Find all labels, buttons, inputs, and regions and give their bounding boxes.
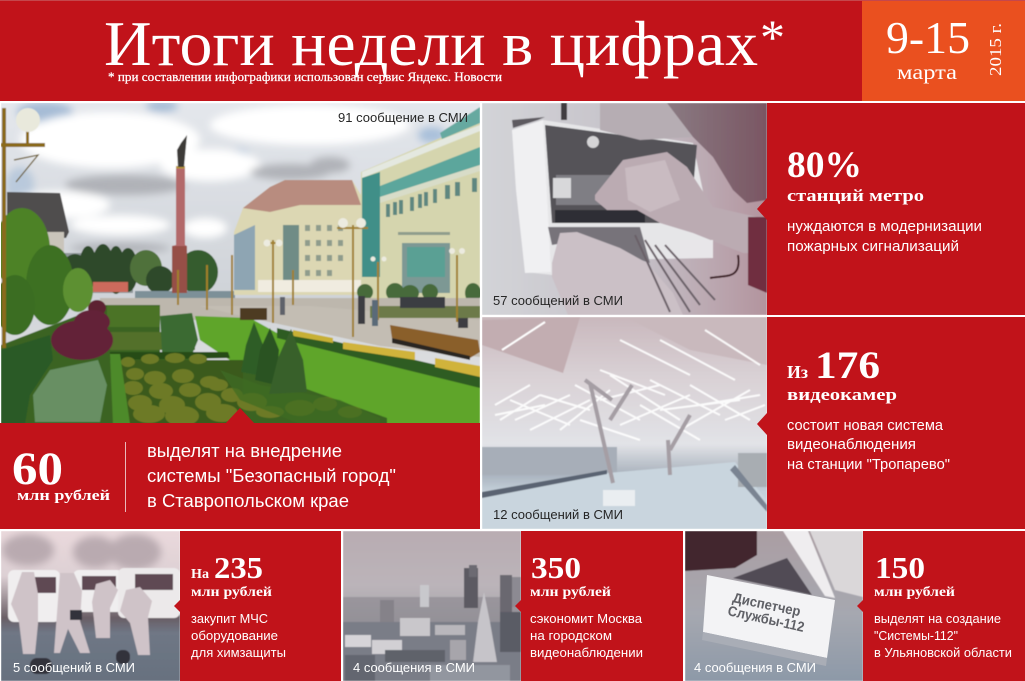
description xyxy=(787,219,982,255)
description: нуждаются в модернизации xyxy=(787,219,982,235)
description xyxy=(530,611,643,660)
tree line behind road xyxy=(356,282,480,299)
conical trees xyxy=(241,322,263,375)
description: для химзащиты xyxy=(191,645,286,660)
subject: видеокамер xyxy=(787,385,897,404)
pointer xyxy=(515,600,521,612)
subject: станций метро xyxy=(787,186,924,205)
panel: 150 million rubles xyxy=(857,531,1025,681)
obelisk xyxy=(172,168,187,247)
panel: 60 million rubles xyxy=(0,408,480,529)
suited workers xyxy=(11,572,152,655)
description xyxy=(147,441,396,511)
description: пожарных сигнализаций xyxy=(787,239,959,255)
date panel: 9-15 xyxy=(886,12,970,63)
unit: млн рублей xyxy=(191,584,272,599)
unit: млн рублей xyxy=(17,488,110,504)
photo: emergency workers xyxy=(1,531,180,681)
date panel xyxy=(862,1,1025,101)
photo: Stavropol square xyxy=(0,100,481,426)
people xyxy=(280,296,468,328)
description xyxy=(787,418,950,473)
figure: 235 xyxy=(214,550,263,585)
description: системы "Безопасный город" xyxy=(147,466,396,486)
panel: 350 million rubles xyxy=(515,531,683,681)
pointer xyxy=(174,600,180,612)
pointer up xyxy=(225,408,255,424)
date panel: марта xyxy=(897,60,958,84)
date panel: 2015 г. xyxy=(986,23,1005,76)
description xyxy=(191,611,286,660)
description: сэкономит Москва xyxy=(530,611,643,626)
panel: 235 million rubles xyxy=(174,531,341,681)
panel: 80 percent of metro stations xyxy=(757,103,1025,315)
sign with dispatcher label xyxy=(702,575,835,666)
hedge block xyxy=(160,313,198,352)
message count: 12: 12 сообщений в СМИ xyxy=(493,507,623,522)
source note: * при составлении инфографики использован сервис Яндекс. Новости xyxy=(108,70,502,84)
description: видеонаблюдении xyxy=(530,645,643,660)
figure: 150 xyxy=(875,550,925,585)
flower beds and hedges xyxy=(277,328,480,388)
message count: 57: 57 сообщений в СМИ xyxy=(493,293,623,308)
right building xyxy=(361,123,480,300)
title asterisk: * xyxy=(760,9,785,65)
message count: 5: 5 сообщений в СМИ xyxy=(13,660,135,675)
vans xyxy=(8,570,60,622)
description: выделят на внедрение xyxy=(147,441,342,461)
header banner xyxy=(0,0,1025,101)
pointer xyxy=(757,198,767,220)
distant trees xyxy=(61,244,218,294)
description: видеонаблюдения xyxy=(787,437,916,453)
photo: fire alarm installation xyxy=(482,103,767,315)
unit: млн рублей xyxy=(874,584,955,599)
photo: Moscow skyline xyxy=(343,531,521,681)
message count: 4 (dispatcher): 4 сообщения в СМИ xyxy=(694,660,816,675)
device body xyxy=(536,120,710,275)
panel: 176 cameras xyxy=(757,317,1025,529)
wires and head xyxy=(600,103,693,140)
figure: 60 xyxy=(12,443,63,495)
circuit board xyxy=(545,125,697,223)
sign with dispatcher label: Службы-112 xyxy=(726,602,806,635)
left building xyxy=(7,192,69,238)
message count: 4 (Moscow): 4 сообщения в СМИ xyxy=(353,660,475,675)
lamps xyxy=(1,108,45,348)
photo: Troparevo station xyxy=(482,317,767,529)
description: на станции "Тропарево" xyxy=(787,457,950,473)
description: в Ульяновской области xyxy=(874,645,1012,660)
description: состоит новая система xyxy=(787,418,944,434)
garden bed xyxy=(1,305,387,424)
unit: млн рублей xyxy=(530,584,611,599)
description: выделят на создание xyxy=(874,611,1001,626)
description: в Ставропольском крае xyxy=(147,491,349,511)
prefix: Из xyxy=(787,362,808,382)
figure: 80% xyxy=(787,145,862,186)
shrubs xyxy=(51,320,113,360)
title: Итоги недели в цифрах xyxy=(104,8,758,79)
lower hand xyxy=(552,232,683,315)
pointer xyxy=(857,600,863,612)
upper hand xyxy=(595,152,757,253)
benches xyxy=(390,325,480,358)
pointer xyxy=(757,413,767,435)
left trees xyxy=(0,208,93,335)
lawn xyxy=(195,316,480,424)
description: "Системы-112" xyxy=(874,628,958,643)
prefix: На xyxy=(191,566,209,581)
road xyxy=(100,298,480,320)
photo: dispatcher desk sign xyxy=(685,531,863,681)
sign with dispatcher label: Диспетчер xyxy=(731,589,802,619)
message count: 91: 91 сообщение в СМИ xyxy=(338,110,468,125)
figure: 176 xyxy=(815,344,880,387)
description: оборудование xyxy=(191,628,278,643)
middle building xyxy=(234,180,361,295)
description: на городском xyxy=(530,628,612,643)
description: закупит МЧС xyxy=(191,611,268,626)
figure: 350 xyxy=(531,550,581,585)
description xyxy=(874,611,1012,660)
